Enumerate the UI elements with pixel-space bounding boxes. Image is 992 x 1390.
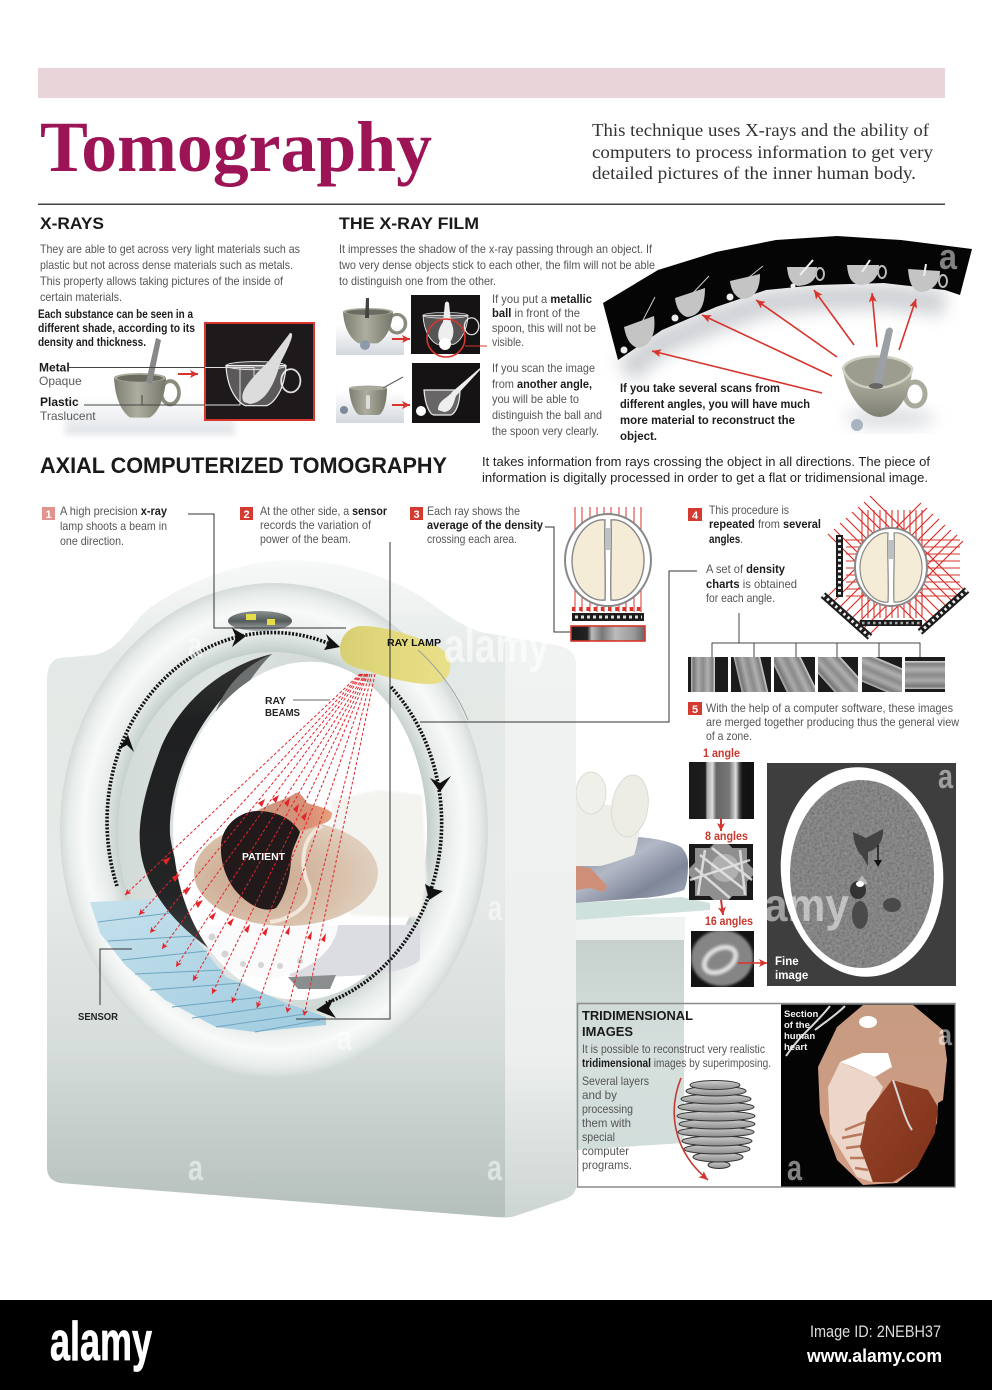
section caption <box>784 1009 819 1053</box>
head support <box>194 820 378 926</box>
substance caption: density and thickness. <box>38 335 146 349</box>
watermarks: alamy <box>444 620 549 673</box>
section caption: of the <box>784 1020 810 1031</box>
watermarks: a <box>337 1017 353 1058</box>
another angle text: If you scan the image <box>492 361 595 375</box>
density charts <box>688 657 945 692</box>
step 3: 3 <box>413 509 420 521</box>
watermarks: a <box>488 887 503 928</box>
intro text <box>592 120 933 183</box>
heart outline <box>818 1005 947 1185</box>
caption: several scans: object. <box>620 429 657 443</box>
x-ray 2 <box>412 363 480 423</box>
site url: www.alamy.com <box>806 1346 942 1366</box>
substance caption <box>38 307 195 349</box>
red curved arrow <box>674 1078 708 1180</box>
label: 1 angle: 1 angle <box>703 748 740 760</box>
tridimensional text: processing <box>582 1102 633 1116</box>
another angle text: you will be able to <box>492 392 579 406</box>
big cup with spoon and ball <box>843 328 935 431</box>
film body text: It impresses the shadow of the x-ray passing through an object. If <box>339 242 653 256</box>
density chart tree connector <box>712 613 920 657</box>
section caption: human <box>784 1031 815 1042</box>
step 1 <box>42 504 167 548</box>
film body text <box>339 242 655 288</box>
x-rays body text: This property allows taking pictures of the inside of <box>40 274 284 288</box>
film body text: two very dense objects stick to each other, the film will not be able <box>339 258 655 272</box>
watermarks: a <box>487 1147 503 1188</box>
watermarks: a <box>188 624 203 665</box>
labels: metal and plastic: Plastic <box>40 395 79 409</box>
ray mid arrowheads <box>163 795 326 942</box>
caption: several scans: more material to reconstruct the <box>620 413 795 427</box>
rotation arrowheads <box>118 628 451 1018</box>
labels: metal and plastic: Opaque <box>39 374 82 388</box>
label: sensor: SENSOR <box>78 1011 118 1023</box>
muscle ribs <box>842 1122 868 1170</box>
table and leg behind scanner <box>576 897 710 1150</box>
heading: the x-ray film: THE X-RAY FILM <box>339 214 479 233</box>
axial intro text: It takes information from rays crossing the object in all directions. The piece of <box>482 455 931 469</box>
step 4: 4 <box>692 510 699 522</box>
CT scanner illustration <box>47 514 710 1217</box>
step 3: average of the density <box>427 518 543 532</box>
label: patient: PATIENT <box>242 851 286 863</box>
step 4: angles. <box>709 532 743 546</box>
recess <box>118 652 430 1012</box>
another angle text: distinguish the ball and <box>492 408 602 422</box>
head cross-section with parallel rays <box>565 507 651 641</box>
intro text: detailed pictures of the inner human body. <box>592 163 916 183</box>
another angle text <box>492 361 602 438</box>
tridimensional text: programs. <box>582 1158 632 1172</box>
metallic ball text <box>492 292 596 349</box>
red scan arrows <box>652 290 916 393</box>
head cross-section with rays from several angles <box>823 496 967 637</box>
CT brain scan <box>752 758 956 986</box>
axial intro text <box>482 455 931 485</box>
labels: metal and plastic <box>39 360 254 423</box>
heading: tridimensional images: IMAGES <box>582 1024 633 1039</box>
metallic ball text: visible. <box>492 335 524 349</box>
step 2: power of the beam. <box>260 532 351 546</box>
intro text: computers to process information to get very <box>592 142 933 162</box>
ray lamp <box>340 626 468 720</box>
reconstruction 8 angles <box>689 844 753 900</box>
label: fine image: image <box>775 970 808 982</box>
heart image <box>781 1004 954 1188</box>
tridimensional text: special <box>582 1130 615 1144</box>
image reconstruction sequence <box>686 748 956 987</box>
arrow <box>720 818 722 831</box>
watermark: lamy <box>752 879 849 931</box>
label: fine image <box>775 956 808 982</box>
step 1: A high precision x-ray <box>60 504 167 518</box>
CT brain scan: a <box>938 758 954 796</box>
film body text: to distinguish one from the other. <box>339 274 496 288</box>
blanket <box>576 837 688 903</box>
arrow <box>392 338 410 340</box>
heading: tridimensional images <box>582 1008 693 1039</box>
tridimensional text <box>582 1042 771 1172</box>
step 2 <box>240 504 387 546</box>
substance caption: Each substance can be seen in a <box>38 307 193 321</box>
step 5 <box>688 701 959 743</box>
step 1: one direction. <box>60 534 124 548</box>
dotted rotation arrows <box>107 633 442 1003</box>
density charts text <box>706 562 797 605</box>
section caption: Section <box>784 1009 819 1020</box>
step 5: 5 <box>692 704 698 716</box>
x-ray 1 with red circle <box>411 295 487 357</box>
arrow <box>392 404 410 406</box>
ray beams <box>125 674 375 1016</box>
x-rays body text: They are able to get across very light materials such as <box>40 242 300 256</box>
label: ray beams: BEAMS <box>265 707 300 719</box>
tridimensional text: Several layers <box>582 1074 649 1088</box>
dark inner band <box>140 654 304 998</box>
film shadow <box>625 296 945 372</box>
density charts text: charts is obtained <box>706 577 797 591</box>
pink header band <box>38 68 945 98</box>
x-rays body text: plastic but not across dense materials such as metals. <box>40 258 293 272</box>
scene 2: rotated cup <box>336 377 404 423</box>
arrow to fine image <box>738 962 767 964</box>
heading: x-rays: X-RAYS <box>40 214 104 233</box>
density charts text: for each angle. <box>706 591 775 605</box>
step 1: 1 <box>45 509 52 521</box>
step 2: records the variation of <box>260 518 372 532</box>
heading: axial computerized tomography: AXIAL COMPUTERIZED TOMOGRAPHY <box>40 453 447 478</box>
sensor <box>90 898 326 1032</box>
caption: several scans: different angles, you will have much <box>620 397 810 411</box>
tridimensional text: them with <box>582 1116 631 1130</box>
vessels <box>786 1006 912 1130</box>
patient hair <box>221 811 300 910</box>
axial intro text: information is digitally processed in order to get a flat or tridimensional image. <box>482 471 928 485</box>
ventricles <box>853 829 883 866</box>
step 3: Each ray shows the <box>427 504 520 518</box>
substance caption: different shade, according to its <box>38 321 195 335</box>
step 1: lamp shoots a beam in <box>60 519 167 533</box>
tridimensional text: and by <box>582 1088 617 1102</box>
alamy footer bar <box>0 1300 992 1390</box>
labels: metal and plastic: Traslucent <box>40 409 96 423</box>
patient face <box>255 793 332 832</box>
step 5: are merged together producing thus the general view <box>706 715 959 729</box>
step 3: crossing each area. <box>427 532 517 546</box>
step 4: This procedure is <box>709 503 789 517</box>
label: ray beams <box>265 695 300 719</box>
scene 1: cup with ball <box>336 298 406 355</box>
another angle text: from another angle, <box>492 377 592 391</box>
step 5: of a zone. <box>706 729 752 743</box>
arrow <box>721 900 723 915</box>
patient hand <box>576 866 607 892</box>
label: ray beams: RAY <box>265 695 286 707</box>
connector lines for steps <box>100 514 697 1019</box>
step 5: With the help of a computer software, these images <box>706 701 953 715</box>
scanner body <box>47 560 576 1217</box>
label: 8 angles: 8 angles <box>705 831 748 843</box>
metallic ball text: spoon, this will not be <box>492 321 596 335</box>
curved black film strip <box>603 236 972 360</box>
label: fine image: Fine <box>775 956 799 968</box>
scanner ring <box>60 583 488 1077</box>
labels: metal and plastic: Metal <box>39 360 70 374</box>
layered slabs <box>677 1080 755 1168</box>
step 4 <box>688 503 821 546</box>
alamy logo: alamy <box>50 1310 152 1372</box>
another angle text: the spoon very clearly. <box>492 424 599 438</box>
metallic ball text: If you put a metallic <box>492 292 592 306</box>
white contrast <box>840 1053 892 1077</box>
panel: x-rays <box>38 214 314 435</box>
label: 16 angles: 16 angles <box>705 916 753 928</box>
caption: several scans <box>620 381 810 443</box>
patient feet <box>576 772 652 866</box>
label: ray lamp: RAY LAMP <box>387 637 441 649</box>
section caption: heart <box>784 1042 808 1053</box>
icon: opaque cup with spoon <box>114 338 179 418</box>
cup shadow <box>65 395 235 435</box>
intro text: This technique uses X-rays and the ability of <box>592 120 929 140</box>
watermark: a <box>938 1019 952 1052</box>
caption: several scans: If you take several scans from <box>620 381 780 395</box>
pale tissue <box>828 1062 883 1182</box>
scanner side face <box>505 637 576 1217</box>
bed plate <box>198 925 420 989</box>
tridimensional text: tridimensional images by superimposing. <box>582 1056 771 1070</box>
metallic ball text: ball in front of the <box>492 306 580 320</box>
reconstruction 1 angle <box>689 762 754 819</box>
panel: tridimensional images <box>578 1004 955 1188</box>
arrow <box>178 373 198 375</box>
watermarks: a <box>188 1147 204 1188</box>
panel: the x-ray film <box>336 214 972 443</box>
indicator lights <box>228 611 292 631</box>
watermarks <box>188 620 549 1188</box>
step 2: 2 <box>243 509 250 521</box>
heading: tridimensional images: TRIDIMENSIONAL <box>582 1008 693 1023</box>
tridimensional text: computer <box>582 1144 629 1158</box>
x-rays body text <box>40 242 300 304</box>
tridimensional text: It is possible to reconstruct very realistic <box>582 1042 765 1056</box>
heart image: a <box>787 1147 803 1188</box>
patient body sheet <box>330 790 427 918</box>
x-rays body text: certain materials. <box>40 290 122 304</box>
step 4: repeated from several <box>709 517 821 531</box>
reconstruction 16 angles <box>691 930 754 987</box>
watermark on film: a <box>939 236 958 277</box>
title: Tomography <box>40 107 432 187</box>
step 2: At the other side, a sensor <box>260 504 387 518</box>
density charts text: A set of density <box>706 562 785 576</box>
x-ray image of cup <box>205 323 314 420</box>
white opening <box>173 662 427 1000</box>
dark muscle <box>860 1080 938 1182</box>
film cup images <box>620 260 947 354</box>
step 3 <box>410 504 570 632</box>
image id: Image ID: 2NEBH37 <box>810 1323 941 1341</box>
